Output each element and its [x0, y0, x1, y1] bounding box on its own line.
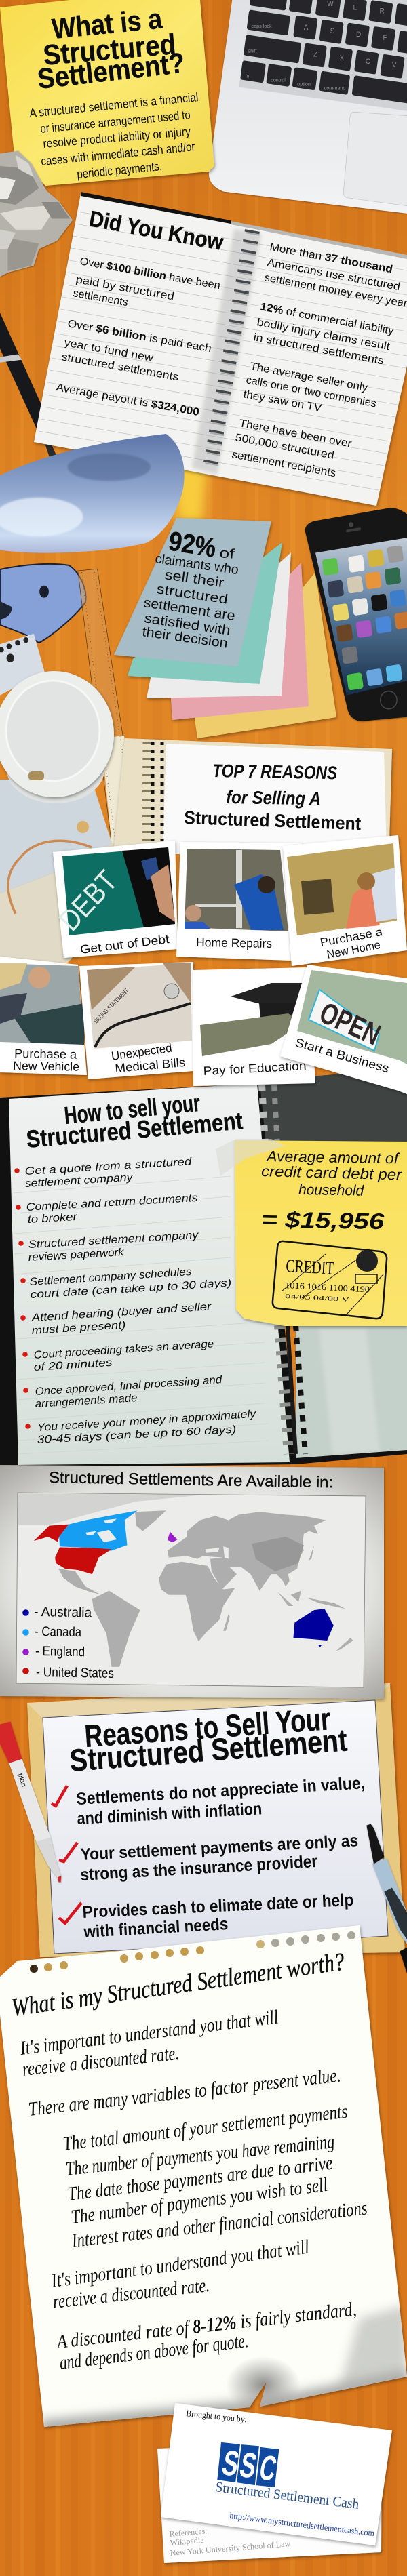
- polaroid: purchase a new home: [283, 835, 407, 966]
- sponsor card: Brought to you by:: [186, 2408, 248, 2424]
- steps list: [14, 1156, 257, 1446]
- whiteboard heading: Structured Settlement: [69, 1722, 349, 1778]
- text: average amount: household: [298, 1181, 364, 1199]
- steps list: reviews paperwork: [28, 1247, 125, 1264]
- laptop: fn: [246, 74, 249, 79]
- steps list: Complete and return documents: [26, 1192, 198, 1213]
- map heading: Structured Settlements Are Available in:: [49, 1468, 333, 1491]
- text: average amount: [261, 1148, 403, 1199]
- text: 92% of claimants: of: [219, 546, 235, 562]
- text: worth explanation: It's important to understand you that will: [50, 2236, 311, 2292]
- checklist: strong as the insurance provider: [80, 1852, 318, 1885]
- how to sell notebook: [0, 1068, 407, 1468]
- whiteboard heading: [69, 1701, 349, 1778]
- black board marker: [366, 1824, 407, 1979]
- stack of coloured notes: [114, 518, 336, 738]
- text: right column facts: [231, 241, 407, 479]
- polaroid: purchase a new home: Purchase a: [319, 925, 384, 949]
- text: worth explanation: The date those payments are due to arrive: [66, 2152, 334, 2205]
- checklist: [52, 1773, 366, 1941]
- steps list: 30-45 days (can be up to 60 days): [37, 1424, 237, 1446]
- steps list: Get a quote from a structured: [24, 1156, 193, 1178]
- text: 92% of claimants: satisfied with: [143, 611, 231, 639]
- steps list: must be present): [31, 1319, 126, 1337]
- map legend: - United States: [36, 1665, 114, 1681]
- polaroid: get out of debt: Get out of Debt: [79, 932, 170, 957]
- text: 92% of claimants: 92%: [167, 526, 218, 563]
- notebook: did you know: [34, 192, 407, 506]
- icon: credit card: [273, 1241, 387, 1319]
- polaroid: purchase a new vehicle: Purchase a: [14, 1047, 77, 1062]
- icon: credit card: 1016 1016 1100 4190: [285, 1280, 370, 1295]
- business cards: sponsor and references: [157, 2403, 392, 2563]
- steps list: settlement company: [24, 1172, 134, 1190]
- text: left column facts: Over $6 billion is paid each: [66, 318, 212, 355]
- whiteboard frame: [27, 1683, 405, 1957]
- laptop: D: [356, 31, 361, 39]
- whiteboard: reasons to sell: [43, 1700, 388, 1954]
- heading: how to sell: [25, 1089, 244, 1153]
- red board marker: plan: [16, 1773, 27, 1788]
- text: right column facts: Americans use structured: [266, 257, 401, 293]
- polaroid: pay for education: [193, 967, 315, 1086]
- heading: top 7 reasons: TOP 7 REASONS: [212, 761, 337, 783]
- laptop: R: [380, 7, 385, 16]
- text: 92% of claimants: sell their: [163, 567, 225, 590]
- stat: $15,956: = $15,956: [261, 1207, 385, 1234]
- heading: how to sell: Structured Settlement: [25, 1106, 244, 1153]
- text: right column facts: 500,000 structured: [234, 432, 335, 462]
- laptop: F: [383, 35, 387, 42]
- text: definition: cases with immediate cash and/or: [40, 140, 195, 168]
- text: worth explanation: receive a discounted rate.: [21, 2042, 180, 2080]
- polaroid: start a business: Start a Business: [294, 1036, 391, 1075]
- steps list: to broker: [27, 1211, 78, 1226]
- spiral note pad: [0, 634, 45, 696]
- steps list: Court proceeding takes an average: [33, 1338, 214, 1361]
- blue stapler: [0, 564, 86, 643]
- text: 92% of claimants: [141, 526, 239, 651]
- text: worth explanation: receive a discounted rate.: [52, 2274, 210, 2313]
- checklist: Provides cash to elimate date or help: [82, 1891, 354, 1922]
- polaroid: home repairs: Home Repairs: [196, 935, 272, 950]
- text: definition: periodic payments.: [76, 159, 163, 181]
- text: right column facts: There have been over: [238, 418, 353, 450]
- map legend: - Canada: [35, 1624, 82, 1640]
- heading: what is a structured settlement: Structured: [42, 28, 177, 71]
- laptop: control: [271, 77, 286, 83]
- laptop: shift: [248, 47, 258, 54]
- map legend: [22, 1605, 114, 1681]
- dark notebook cover: [260, 1068, 407, 1152]
- SSC logo: [217, 2442, 279, 2489]
- polaroid: unexpected medical bills: BILLING STATEMENT: [92, 987, 130, 1024]
- text: definition: [28, 90, 199, 181]
- steps list: Once approved, final processing and: [35, 1374, 223, 1398]
- text: 92% of claimants: their decision: [141, 624, 229, 651]
- stained paper sheet: [0, 780, 163, 963]
- text: left column facts: [55, 256, 221, 418]
- text: right column facts: they saw on TV: [242, 388, 323, 414]
- steps list: of 20 minutes: [33, 1357, 113, 1373]
- top 7 reasons notebook: [114, 738, 392, 854]
- checklist: Settlements do not appreciate in value,: [76, 1773, 366, 1809]
- laptop: command: [324, 85, 345, 92]
- polaroid: unexpected medical bills: Medical Bills: [115, 1055, 186, 1075]
- open sign: OPEN: [315, 996, 385, 1052]
- polaroid: purchase a new vehicle: [0, 957, 87, 1075]
- text: left column facts: Over $100 billion have been: [79, 256, 221, 291]
- ruler: [78, 569, 139, 844]
- text: 92% of claimants: settlement are: [142, 595, 236, 624]
- text: right column facts: bodily injury claims result: [256, 317, 391, 353]
- references card: References:: [169, 2526, 208, 2539]
- steps list: arrangements made: [35, 1392, 138, 1410]
- polaroid: purchase a new vehicle: New Vehicle: [13, 1059, 79, 1074]
- text: left column facts: paid by structured: [75, 274, 175, 302]
- references card: New York University School of Law: [170, 2539, 291, 2558]
- text: definition: or insurance arrangement used to: [39, 108, 191, 136]
- checklist: Your settlement payments are only as: [80, 1831, 359, 1864]
- polaroid: get out of debt: [52, 841, 178, 958]
- polaroid: unexpected medical bills: [79, 962, 193, 1079]
- polaroid: unexpected medical bills: Unexpected: [111, 1041, 173, 1063]
- heading: top 7 reasons: for Selling A: [226, 787, 321, 809]
- whiteboard heading: Reasons to Sell Your: [83, 1701, 332, 1754]
- laptop: S: [330, 28, 335, 35]
- notebook spiral binding: [210, 230, 253, 469]
- binder rings: [262, 1085, 305, 1454]
- coffee cup lid: [0, 671, 114, 803]
- check mark 1: [52, 1786, 67, 1806]
- sponsor card: Structured Settlement Cash: [214, 2478, 360, 2512]
- sponsor card: http://www.mystructuredsettlementcash.com: [229, 2510, 375, 2538]
- map legend: - Australia: [34, 1605, 92, 1620]
- text: right column facts: settlement money every year: [263, 272, 407, 310]
- text: right column facts: settlement recipients: [231, 449, 337, 479]
- text: right column facts: More than 37 thousand: [269, 241, 393, 275]
- binder holes: [30, 1931, 355, 1973]
- open sign: [309, 990, 385, 1052]
- black pen: [0, 313, 59, 470]
- steps list: Settlement company schedules: [29, 1266, 192, 1288]
- heading: what is a structured settlement: What is a: [50, 2, 164, 45]
- SSC logo: C: [256, 2449, 279, 2489]
- laptop: Z: [313, 51, 317, 59]
- polaroid: home repairs: [176, 842, 302, 961]
- heading: top 7 reasons: [184, 761, 362, 834]
- plastic right page: [296, 1152, 407, 1460]
- map panel: [0, 1465, 384, 1699]
- text: left column facts: structured settlements: [60, 351, 180, 383]
- notebook top edge: [81, 192, 231, 224]
- text: 92% of claimants: structured: [155, 582, 229, 607]
- SSC logo: S: [218, 2444, 242, 2484]
- text: worth explanation: It's important to understand you that will: [18, 2007, 279, 2059]
- text: definition: resolve product liability or injury: [43, 125, 191, 150]
- text: right column facts: 12% of commercial liability: [259, 301, 395, 337]
- laptop: [209, 0, 407, 214]
- polaroid: get out of debt: DEBT: [52, 864, 124, 938]
- crumpled paper ball: [0, 150, 73, 277]
- red board marker: [0, 1722, 61, 1882]
- laptop: E: [353, 4, 357, 12]
- coffee ring stain: [8, 841, 92, 914]
- text: right column facts: in structured settlements: [252, 331, 385, 367]
- sticky note: what is a structured settlement: [0, 0, 214, 186]
- checklist: and diminish with inflation: [77, 1799, 263, 1828]
- text: worth explanation: The number of payments you wish to sell: [70, 2174, 329, 2228]
- torn note: what is my settlement worth: [0, 1925, 407, 2428]
- text: definition: A structured settlement is a financial: [28, 90, 199, 120]
- text: left column facts: year to fund new: [63, 337, 155, 364]
- polaroid: purchase a new home: New Home: [326, 938, 381, 961]
- icon: credit card: 04/05 04/00 V: [285, 1293, 350, 1303]
- laptop: option: [297, 81, 311, 87]
- polaroid: pay for education: Pay for Education: [203, 1059, 307, 1078]
- references card: [157, 2440, 382, 2563]
- text: 92% of claimants: claimants who: [154, 551, 239, 578]
- laptop: A: [304, 24, 309, 32]
- text: right column facts: calls one or two companies: [245, 374, 377, 409]
- blue computer mouse: [0, 434, 185, 553]
- laptop: X: [340, 55, 344, 62]
- world map: [34, 1510, 353, 1667]
- steps list: Structured settlement company: [28, 1230, 199, 1251]
- heading: top 7 reasons: Structured Settlement: [184, 807, 362, 834]
- smartphone: [305, 508, 407, 721]
- steps list: Attend hearing (buyer and seller: [31, 1301, 212, 1324]
- spine shadow: [192, 229, 261, 475]
- laptop: C: [366, 58, 371, 66]
- heading: what is a structured settlement: [36, 2, 187, 95]
- text: left column facts: Average payout is $324,000: [55, 382, 200, 418]
- text: left column facts: settlements: [72, 287, 129, 308]
- text: worth explanation: and depends on above for quote.: [58, 2330, 250, 2374]
- polaroid: start a business: [280, 965, 407, 1094]
- steps list: You receive your money in approximately: [37, 1409, 257, 1434]
- SSC logo: S: [236, 2446, 260, 2486]
- heading: what is a structured settlement: Settlement?: [36, 47, 187, 95]
- heading: how to sell: How to sell your: [63, 1089, 201, 1129]
- laptop: V: [392, 62, 397, 69]
- text: worth explanation: There are many variables to factor present value.: [27, 2064, 342, 2120]
- heading: did you know: Did You Know: [88, 205, 225, 255]
- text: average amount: Average amount of: [265, 1148, 400, 1167]
- icon: credit card: CREDIT: [286, 1255, 335, 1279]
- laptop: caps lock: [251, 23, 272, 29]
- text: worth explanation: [18, 2007, 368, 2374]
- sponsor card: [161, 2403, 392, 2545]
- spiral binding: [147, 742, 162, 841]
- steps list: court date (can take up to 30 days): [30, 1277, 232, 1301]
- text: right column facts: The average seller only: [249, 361, 368, 394]
- laptop: W: [327, 1, 334, 8]
- text: worth explanation: A discounted rate of 8-12% is fairly standard,: [55, 2298, 357, 2353]
- yellow note: credit card debt: [216, 1139, 407, 1326]
- map legend: - England: [35, 1644, 85, 1659]
- checklist: with financial needs: [83, 1914, 229, 1941]
- text: average amount: credit card debt per: [261, 1163, 403, 1183]
- paper edge shading: [41, 2305, 407, 2428]
- references card: Wikipedia: [170, 2535, 205, 2548]
